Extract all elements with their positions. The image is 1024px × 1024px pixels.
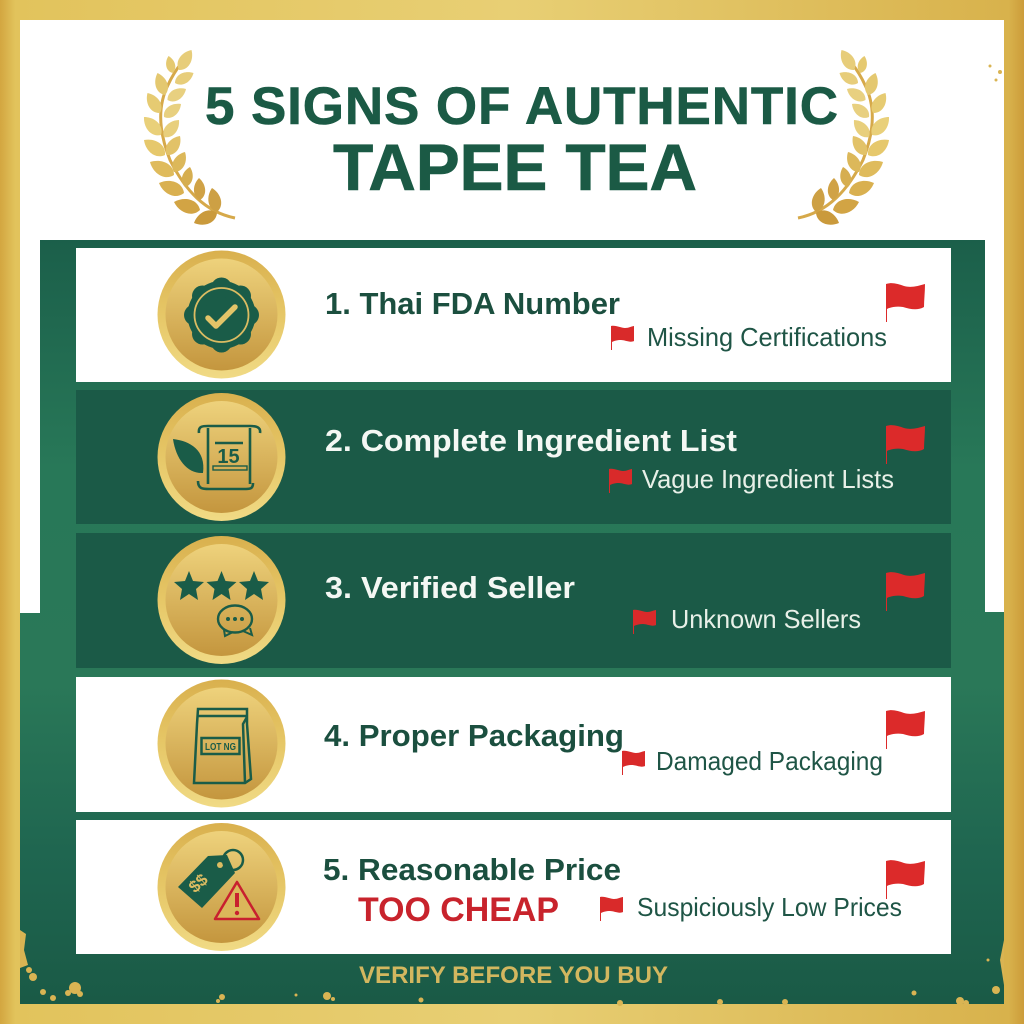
heading 1: 1. Thai FDA Number <box>325 286 620 321</box>
background: green lower panel <box>20 240 1004 1004</box>
row 1: Thai FDA Number <box>76 248 951 382</box>
footer text: VERIFY BEFORE YOU BUY <box>359 962 668 989</box>
large flag 4 <box>886 710 925 749</box>
heading 4: 4. Proper Packaging <box>324 718 624 753</box>
warning 5: Suspiciously Low Prices <box>637 892 902 922</box>
medallion 5: price tag and warning icon: $$ <box>185 870 212 897</box>
warning 3: Unknown Sellers <box>671 604 861 634</box>
large flag 2 <box>886 425 925 464</box>
title: 5 SIGNS OF AUTHENTIC <box>205 77 838 136</box>
large flag 5 <box>886 860 925 899</box>
background: white upper panel <box>20 20 1004 613</box>
medallion 1: seal check icon <box>158 250 286 378</box>
warning 4: Damaged Packaging <box>656 746 883 776</box>
small flag 4 <box>622 751 645 775</box>
small flag 3 <box>633 610 656 634</box>
heading 5: 5. Reasonable Price <box>323 852 621 887</box>
medallion 2: scroll and leaf icon <box>158 393 286 521</box>
row 5: Reasonable Price <box>76 820 951 954</box>
title <box>205 77 838 204</box>
small flag 5 <box>600 897 623 921</box>
warning 2: Vague Ingredient Lists <box>642 464 894 494</box>
small flag 2 <box>609 469 632 493</box>
too cheap label: TOO CHEAP <box>358 891 559 929</box>
medallion 3: stars and chat icon <box>158 536 286 664</box>
heading 3: 3. Verified Seller <box>325 570 575 605</box>
medallion 5: price tag and warning icon <box>158 823 286 951</box>
heading 2: 2. Complete Ingredient List <box>325 423 737 458</box>
right laurel <box>798 47 894 229</box>
left laurel <box>139 47 235 229</box>
row 2: Complete Ingredient List <box>76 390 951 524</box>
row 4: Proper Packaging <box>76 677 951 812</box>
medallion 2: scroll and leaf icon: 15 <box>217 446 240 468</box>
small flag 1 <box>611 326 634 350</box>
row 3: Verified Seller <box>76 533 951 668</box>
warning 1: Missing Certifications <box>647 322 887 352</box>
title: TAPEE TEA <box>333 130 697 204</box>
medallion 4: package icon: LOT NG <box>205 742 236 753</box>
large flag 1 <box>886 283 925 322</box>
medallion 4: package icon <box>158 680 286 808</box>
large flag 3 <box>886 572 925 611</box>
